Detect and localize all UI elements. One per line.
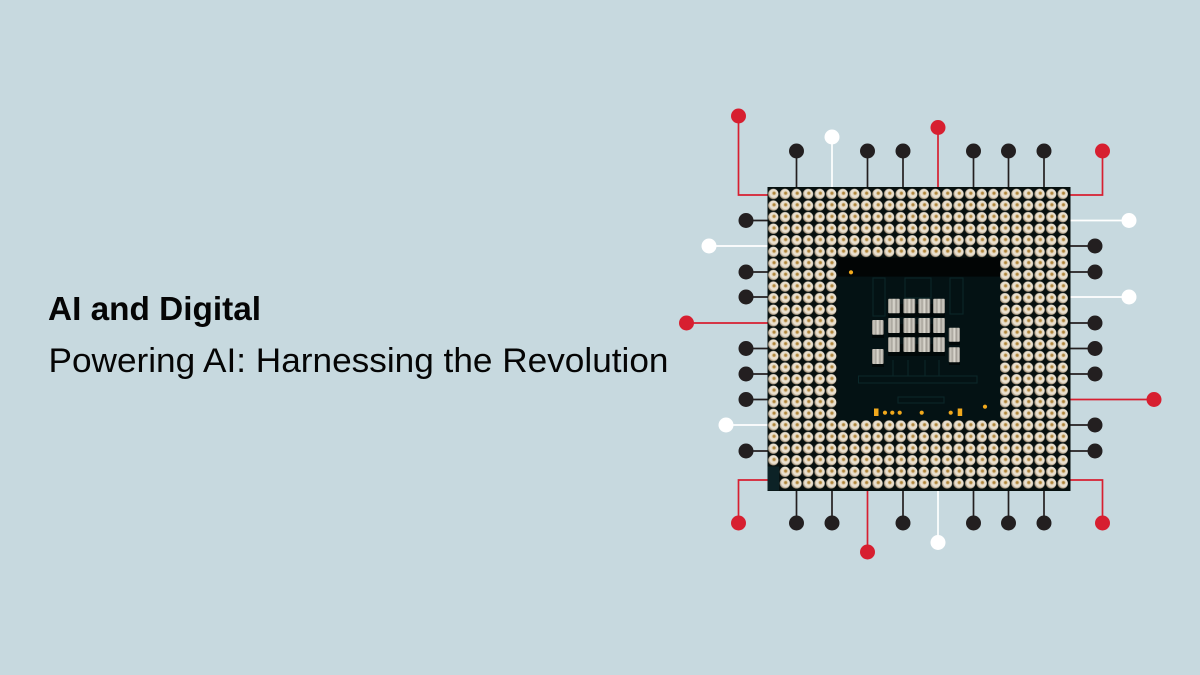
connector: black top 1: [789, 144, 804, 188]
connector: black left 6: [738, 392, 768, 407]
connector: black right 5: [1070, 366, 1102, 382]
title block: [48, 290, 668, 380]
connector: black left 4: [738, 341, 768, 356]
connector: black right 2: [1070, 264, 1102, 280]
capacitor shadows: [872, 304, 960, 367]
connector: red left: [679, 316, 768, 330]
connector: black right 6: [1070, 418, 1102, 432]
chip centre die: [837, 258, 1000, 420]
die top shadow band: [837, 258, 1000, 277]
connector: white left 2: [718, 418, 768, 432]
chip pins: [768, 188, 1068, 489]
connector: black bottom 3: [896, 490, 910, 530]
connector: white left 1: [702, 238, 768, 254]
connector: red top-left elbow: [731, 108, 768, 195]
circuit traces: [858, 278, 977, 403]
connector: white right 1: [1070, 213, 1136, 228]
connector: black top 5: [1001, 144, 1016, 188]
connector: red bottom-right elbow: [1070, 480, 1110, 530]
connectors: left: [679, 213, 768, 530]
connector: black bottom 1: [789, 490, 804, 530]
subheading: Powering AI: Powering AI: Harnessing the Revolution: [48, 342, 668, 380]
connector: red bottom-left elbow: [731, 480, 768, 530]
connector: black left 7: [738, 444, 768, 458]
connector: black right 7: [1070, 444, 1102, 458]
connector: black top 6: [1036, 144, 1052, 188]
connector: black top 3: [896, 144, 910, 188]
connector: red right: [1070, 392, 1162, 407]
connector: white top: [824, 130, 840, 188]
connector: white bottom: [930, 490, 946, 550]
connector: black bottom 5: [1001, 490, 1016, 530]
connector: black bottom 4: [966, 490, 981, 530]
gold contacts: [849, 270, 987, 416]
die background: [837, 258, 1000, 420]
heading: AI and Digital: AI and Digital: [48, 290, 261, 327]
connector: black left 1: [738, 213, 768, 228]
capacitors: [872, 299, 960, 364]
connector: black right 3: [1070, 316, 1102, 330]
connector: black left 3: [738, 290, 768, 304]
connector: red top: [930, 120, 946, 188]
connector: black bottom 6: [1036, 490, 1052, 530]
connector: black right 1: [1070, 238, 1102, 254]
connector: black left 2: [738, 264, 768, 280]
processor chip: [768, 187, 1070, 491]
connector: black top 2: [860, 144, 875, 188]
missing pins corner: [768, 466, 779, 490]
connectors: bottom: [789, 490, 1052, 560]
connector: black left 5: [738, 366, 768, 382]
connectors: right: [1070, 213, 1162, 530]
connector: black top 4: [966, 144, 981, 188]
connector: black bottom 2: [824, 490, 840, 530]
connector: red bottom: [860, 490, 875, 560]
connectors: top: [731, 108, 1110, 195]
chip pin grid: [768, 187, 1070, 491]
connector: white right 2: [1070, 290, 1136, 304]
connector: black right 4: [1070, 341, 1102, 356]
connector: red top-right elbow: [1070, 144, 1110, 195]
